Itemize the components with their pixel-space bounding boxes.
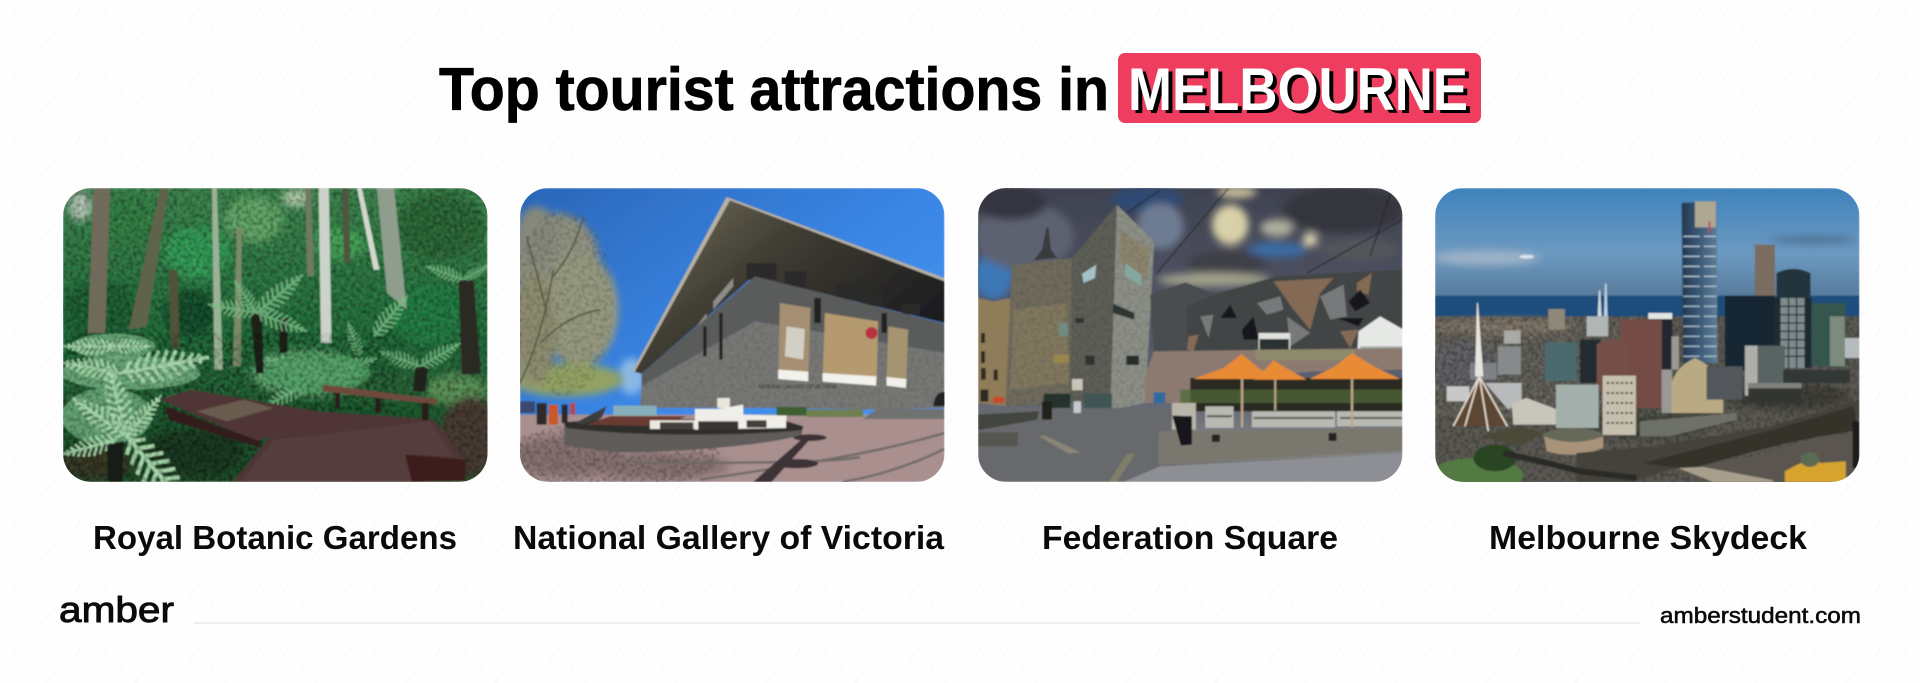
mid-rise buildings (1620, 320, 1662, 408)
banners (778, 303, 811, 381)
plaza (520, 415, 944, 482)
plaza shadows (510, 436, 730, 480)
caption: National Gallery of Victoria: National Gallery of Victoria (513, 519, 945, 556)
white tent (1356, 315, 1402, 350)
ground (978, 407, 1343, 482)
tree (510, 206, 623, 396)
Eureka tower (1682, 201, 1718, 363)
cafe area (1190, 378, 1402, 411)
photo card: Federation Square (978, 188, 1402, 482)
boardwalk (160, 390, 465, 482)
caption: Federation Square: Federation Square (1042, 519, 1338, 556)
brand logo: amber (59, 589, 174, 630)
city name badge: MELBOURNE (1132, 59, 1472, 126)
far-left heritage building (978, 298, 1010, 406)
photo card: National Gallery of Victoria (520, 188, 944, 482)
fountain model (564, 422, 804, 453)
angular towers (1005, 258, 1072, 407)
wall lettering: NATIONAL GALLERY OF VICTORIA (759, 385, 837, 391)
Hamer Hall (1543, 428, 1603, 443)
umbrellas (1194, 353, 1400, 380)
mosaic facade (1150, 282, 1217, 351)
parkland (1438, 458, 1524, 482)
photo card: Melbourne Skydeck (1435, 188, 1860, 482)
low concrete wall and sign (1159, 428, 1402, 465)
photo card: Royal Botanic Gardens (63, 188, 488, 482)
stone wall (1145, 348, 1402, 403)
caption: Royal Botanic Gardens: Royal Botanic Gardens (93, 519, 457, 556)
spire (1034, 228, 1057, 260)
gallery roof (632, 197, 944, 374)
pedestrians (520, 401, 575, 425)
gallery walls (642, 276, 944, 386)
title text: Top tourist attractions in (439, 56, 1109, 123)
background towers (1548, 309, 1565, 330)
Arts Centre spire (1475, 303, 1483, 376)
caption: Melbourne Skydeck: Melbourne Skydeck (1489, 519, 1808, 556)
title (439, 53, 1481, 126)
city name badge: MELBOURNE (1128, 56, 1468, 123)
river and yards (1577, 400, 1860, 482)
cafe tables (1205, 406, 1402, 428)
Flinders Street Station (1784, 460, 1847, 482)
website url: amberstudent.com (1660, 603, 1861, 628)
